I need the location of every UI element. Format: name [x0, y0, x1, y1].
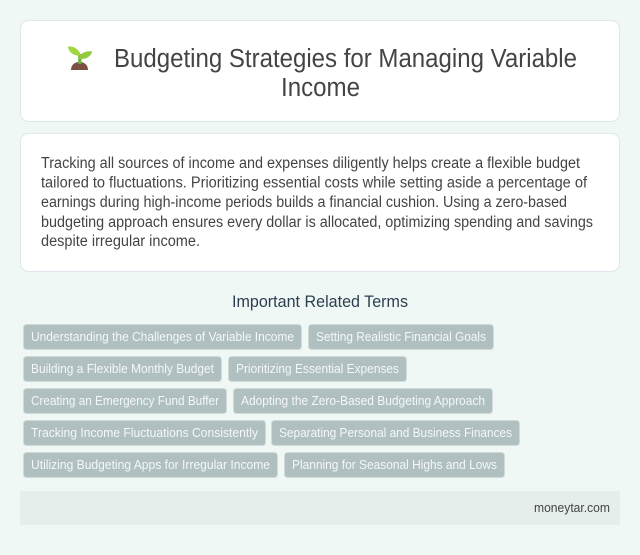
- footer: moneytar.com: [534, 501, 610, 515]
- title: Income: [281, 74, 360, 102]
- tags: related terms: [24, 324, 520, 478]
- icon: seedling: [68, 46, 92, 70]
- tag: separating finances: [272, 420, 520, 446]
- tag: essential expenses: [228, 356, 406, 382]
- tag: tracking fluctuations: [24, 420, 266, 446]
- text block: summary: Tracking all sources of income and expenses diligently helps create a flexible budget: [41, 155, 581, 172]
- tag: understanding challenges: [24, 324, 302, 350]
- tag: essential expenses: Prioritizing Essential Expenses: [236, 361, 399, 376]
- tag: understanding challenges: Understanding the Challenges of Variable Income: [31, 329, 294, 344]
- tag: zero-based: Adopting the Zero-Based Budgeting Approach: [241, 393, 485, 408]
- tag: flexible budget: [24, 356, 222, 382]
- text block: summary: budgeting approach ensures every dollar is allocated, optimizing spending and savings: [41, 214, 593, 231]
- panel: summary paragraph: [20, 134, 620, 272]
- panel: title card: [20, 20, 620, 122]
- tag: tracking fluctuations: Tracking Income Fluctuations Consistently: [31, 425, 258, 440]
- tag: seasonal planning: Planning for Seasonal Highs and Lows: [292, 457, 497, 472]
- tag: seasonal planning: [284, 452, 504, 478]
- tag: emergency fund: [24, 388, 226, 414]
- tag: realistic goals: Setting Realistic Financial Goals: [316, 329, 486, 344]
- tag: budgeting apps: [24, 452, 278, 478]
- text block: summary: earnings during high-income periods builds a financial cushion. Using a zero-based: [41, 194, 567, 211]
- footer: [20, 491, 620, 525]
- tag: budgeting apps: Utilizing Budgeting Apps for Irregular Income: [31, 457, 270, 472]
- title: [114, 45, 577, 102]
- tag: zero-based: [234, 388, 492, 414]
- tag: emergency fund: Creating an Emergency Fund Buffer: [31, 393, 220, 408]
- tag: realistic goals: [308, 324, 494, 350]
- text block: summary: despite irregular income.: [41, 233, 200, 250]
- title: Budgeting Strategies for Managing Variable: [114, 45, 577, 73]
- text block: summary: tailored to fluctuations. Prioritizing essential costs while setting aside a percentage of: [41, 174, 588, 192]
- tag: flexible budget: Building a Flexible Monthly Budget: [31, 361, 214, 376]
- text block: summary: [41, 155, 593, 250]
- heading: important related terms: Important Related Terms: [232, 293, 408, 311]
- tag: separating finances: Separating Personal and Business Finances: [279, 425, 512, 440]
